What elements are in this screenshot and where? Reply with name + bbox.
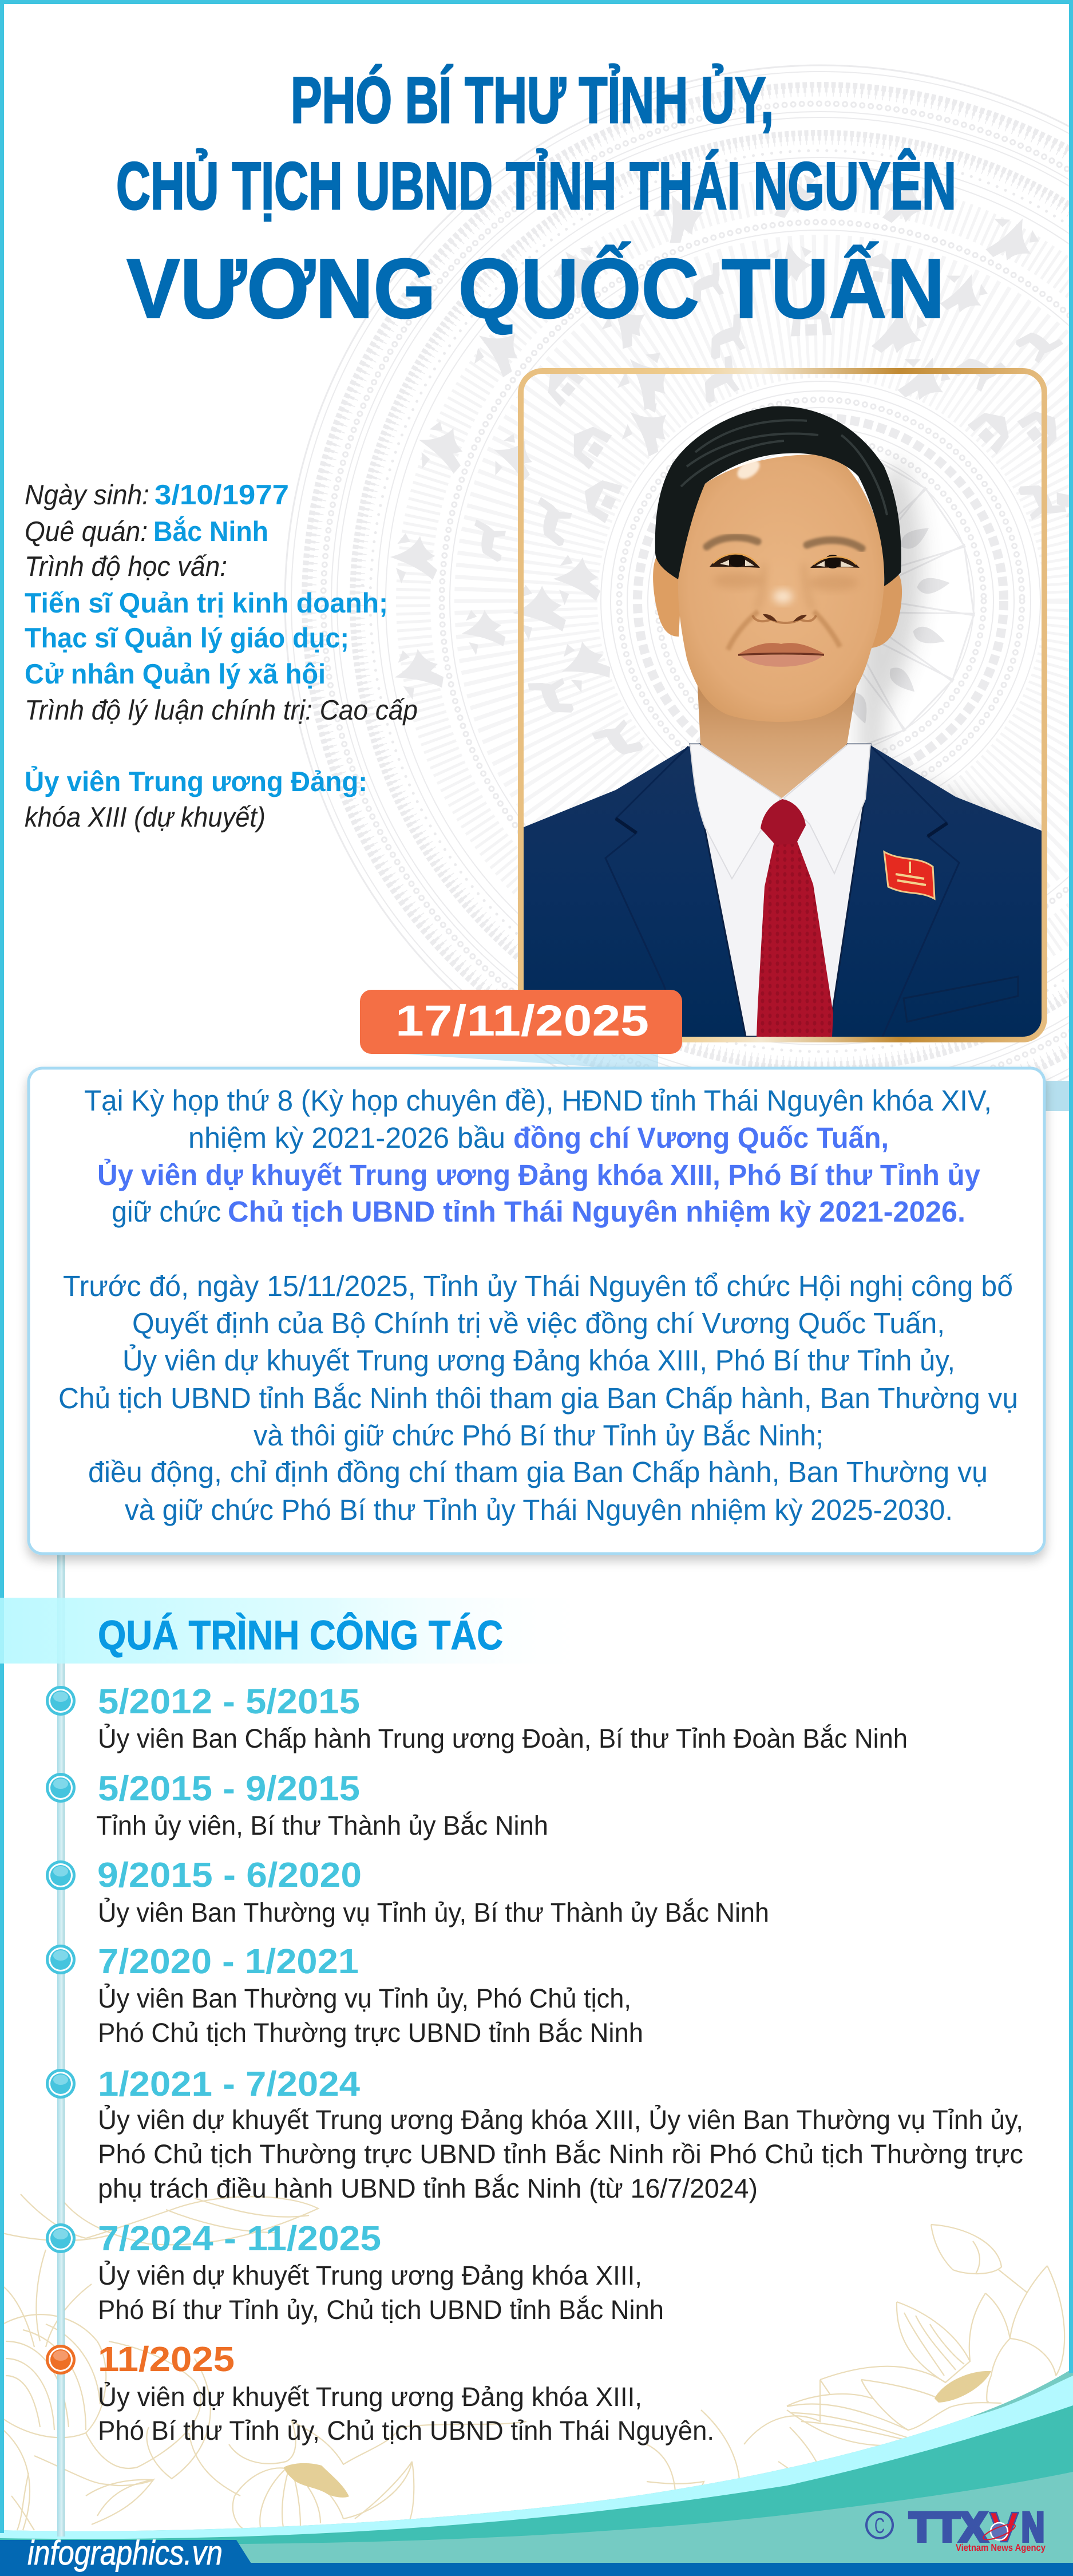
date of birth: 3/10/1977 <box>155 480 289 511</box>
shirt collar right <box>784 744 870 874</box>
item 5/2015 - 9/2015: Tỉnh ủy viên, Bí thư Thành ủy Bắc Ninh <box>96 1810 548 1840</box>
item 5/2012 - 5/2015 <box>46 1682 908 1753</box>
shirt collar <box>690 744 781 879</box>
education <box>25 551 388 690</box>
date of birth <box>25 480 289 511</box>
hometown: Bắc Ninh <box>153 516 268 547</box>
timeline <box>46 1682 1023 2445</box>
item 1/2021 - 7/2024: phụ trách điều hành UBND tỉnh Bắc Ninh (từ 16/7/2024) <box>98 2173 758 2203</box>
item 9/2015 - 6/2020: 9/2015 - 6/2020 <box>97 1855 362 1894</box>
tie knot <box>761 799 806 845</box>
education: Trình độ học vấn: <box>25 551 227 582</box>
date badge <box>360 990 682 1054</box>
second paragraph: điều động, chỉ định đồng chí tham gia Ban Chấp hành, Ban Thường vụ <box>88 1456 988 1488</box>
item 1/2021 - 7/2024: 1/2021 - 7/2024 <box>98 2064 360 2103</box>
footer bar <box>0 2563 1073 2576</box>
item 5/2015 - 9/2015 <box>46 1769 548 1840</box>
left ear <box>653 554 682 637</box>
hair highlights <box>681 420 887 515</box>
date badge: 17/11/2025 <box>395 997 649 1045</box>
personal information <box>25 480 418 833</box>
item 1/2021 - 7/2024: Phó Chủ tịch Thường trực UBND tỉnh Bắc Ninh rồi Phó Chủ tịch Thường trực <box>98 2139 1023 2169</box>
item 7/2024 - 11/2025: Phó Bí thư Tỉnh ủy, Chủ tịch UBND tỉnh Bắc Ninh <box>98 2294 664 2325</box>
central committee <box>25 766 367 833</box>
education: Thạc sĩ Quản lý giáo dục; <box>25 623 349 654</box>
mouth <box>738 643 824 667</box>
copyright mark: C <box>874 2514 885 2538</box>
first paragraph: nhiệm kỳ 2021-2026 bầu <box>188 1121 505 1154</box>
globe <box>981 2521 1017 2543</box>
N letter: N <box>1021 2504 1044 2550</box>
eyebrows <box>707 538 862 548</box>
timeline section heading <box>0 1598 595 1664</box>
central committee: khóa XIII (dự khuyết) <box>25 802 266 833</box>
first paragraph: đồng chí Vương Quốc Tuấn, <box>513 1121 889 1154</box>
eye lids <box>713 554 856 564</box>
item 7/2024 - 11/2025: 7/2024 - 11/2025 <box>98 2219 381 2258</box>
second paragraph: Quyết định của Bộ Chính trị về việc đồng chí Vương Quốc Tuấn, <box>132 1307 945 1340</box>
title name: VƯƠNG QUỐC TUẤN <box>126 242 945 336</box>
first paragraph <box>84 1084 992 1228</box>
item 1/2021 - 7/2024: Ủy viên dự khuyết Trung ương Đảng khóa XIII, Ủy viên Ban Thường vụ Tỉnh ủy, <box>98 2104 1023 2135</box>
portrait photo <box>518 406 1047 1042</box>
nose highlight <box>773 590 793 603</box>
photo shadow <box>851 460 1042 831</box>
TTXVN logo <box>866 2503 1046 2553</box>
second paragraph: Chủ tịch UBND tỉnh Bắc Ninh thôi tham gia Ban Chấp hành, Ban Thường vụ <box>58 1382 1018 1415</box>
neck <box>697 675 858 799</box>
main text panel <box>29 1068 1044 1554</box>
party pin <box>884 852 935 899</box>
item 11/2025: 11/2025 <box>98 2340 235 2379</box>
timeline vertical line <box>57 1555 65 2537</box>
eyes <box>710 554 760 568</box>
head <box>653 406 902 722</box>
item 7/2020 - 1/2021: 7/2020 - 1/2021 <box>98 1942 359 1981</box>
item 5/2015 - 9/2015: 5/2015 - 9/2015 <box>98 1769 360 1808</box>
nose <box>753 615 816 623</box>
item 11/2025: Ủy viên dự khuyết Trung ương Đảng khóa XIII, <box>98 2381 642 2412</box>
title <box>116 64 956 336</box>
item 5/2012 - 5/2015: Ủy viên Ban Chấp hành Trung ương Đoàn, Bí thư Tỉnh Đoàn Bắc Ninh <box>98 1723 908 1753</box>
item 7/2020 - 1/2021: Phó Chủ tịch Thường trực UBND tỉnh Bắc Ninh <box>98 2017 643 2048</box>
second paragraph: Trước đó, ngày 15/11/2025, Tỉnh ủy Thái Nguyên tổ chức Hội nghị công bố <box>63 1270 1013 1302</box>
bottom waves <box>0 2368 1073 2576</box>
V letter: V <box>989 2503 1019 2551</box>
second paragraph: và giữ chức Phó Bí thư Tỉnh ủy Thái Nguyên nhiệm kỳ 2025-2030. <box>125 1494 953 1526</box>
item 7/2024 - 11/2025 <box>46 2219 664 2325</box>
item 9/2015 - 6/2020: Ủy viên Ban Thường vụ Tỉnh ủy, Bí thư Thành ủy Bắc Ninh <box>98 1897 769 1927</box>
cheek folds <box>728 611 840 650</box>
hometown <box>25 516 268 547</box>
right ear <box>871 574 902 648</box>
copyright mark <box>866 2512 893 2538</box>
hometown: Quê quán: <box>25 516 148 547</box>
eye whites <box>720 560 854 567</box>
hair <box>655 406 901 586</box>
panel background <box>29 1068 1044 1554</box>
agency name: Vietnam News Agency <box>956 2542 1046 2553</box>
timeline section heading: QUÁ TRÌNH CÔNG TÁC <box>98 1612 503 1658</box>
lotus flowers background <box>0 2192 1064 2530</box>
item 7/2024 - 11/2025: Ủy viên dự khuyết Trung ương Đảng khóa XIII, <box>98 2260 642 2290</box>
item 11/2025: Phó Bí thư Tỉnh ủy, Chủ tịch UBND tỉnh Thái Nguyên. <box>98 2415 714 2445</box>
shirt <box>690 744 870 1037</box>
bronze drum background pattern <box>285 65 1073 1137</box>
title line 1: PHÓ BÍ THƯ TỈNH ỦY, <box>291 64 774 137</box>
infographics.vn tab: infographics.vn <box>27 2534 223 2572</box>
political theory: Trình độ lý luận chính trị: Cao cấp <box>25 695 418 726</box>
second paragraph <box>58 1270 1018 1526</box>
item 1/2021 - 7/2024 <box>46 2064 1023 2203</box>
item 7/2020 - 1/2021: Ủy viên Ban Thường vụ Tỉnh ủy, Phó Chủ tịch, <box>98 1983 631 2013</box>
ribbon behind panel <box>401 1054 1069 1111</box>
item 5/2012 - 5/2015: 5/2012 - 5/2015 <box>98 1682 360 1721</box>
under-eye shading <box>713 572 763 588</box>
date of birth: Ngày sinh: <box>25 480 149 511</box>
photo frame <box>521 371 1044 1040</box>
TTX letters: TTX <box>909 2504 987 2550</box>
first paragraph: Chủ tịch UBND tỉnh Thái Nguyên nhiệm kỳ 2021-2026. <box>228 1195 965 1228</box>
item 9/2015 - 6/2020 <box>46 1855 769 1927</box>
item 11/2025 <box>46 2340 714 2445</box>
second paragraph: và thôi giữ chức Phó Bí thư Tỉnh ủy Bắc Ninh; <box>254 1419 823 1452</box>
forehead highlight <box>734 456 763 483</box>
nose bridge shade <box>757 564 813 610</box>
face <box>678 455 885 722</box>
suit lapels <box>605 744 1018 1037</box>
central committee: Ủy viên Trung ương Đảng: <box>25 766 367 797</box>
first paragraph: Tại Kỳ họp thứ 8 (Kỳ họp chuyên đề), HĐND tỉnh Thái Nguyên khóa XIV, <box>84 1084 992 1117</box>
first paragraph: Ủy viên dự khuyết Trung ương Đảng khóa XIII, Phó Bí thư Tỉnh ủy <box>97 1159 981 1191</box>
education: Cử nhân Quản lý xã hội <box>25 659 326 690</box>
first paragraph: giữ chức <box>112 1195 221 1228</box>
tie <box>757 841 833 1037</box>
suit <box>518 744 1047 1042</box>
second paragraph: Ủy viên dự khuyết Trung ương Đảng khóa XIII, Phó Bí thư Tỉnh ủy, <box>122 1344 955 1377</box>
education: Tiến sĩ Quản trị kinh doanh; <box>25 588 388 619</box>
item 7/2020 - 1/2021 <box>46 1942 643 2048</box>
